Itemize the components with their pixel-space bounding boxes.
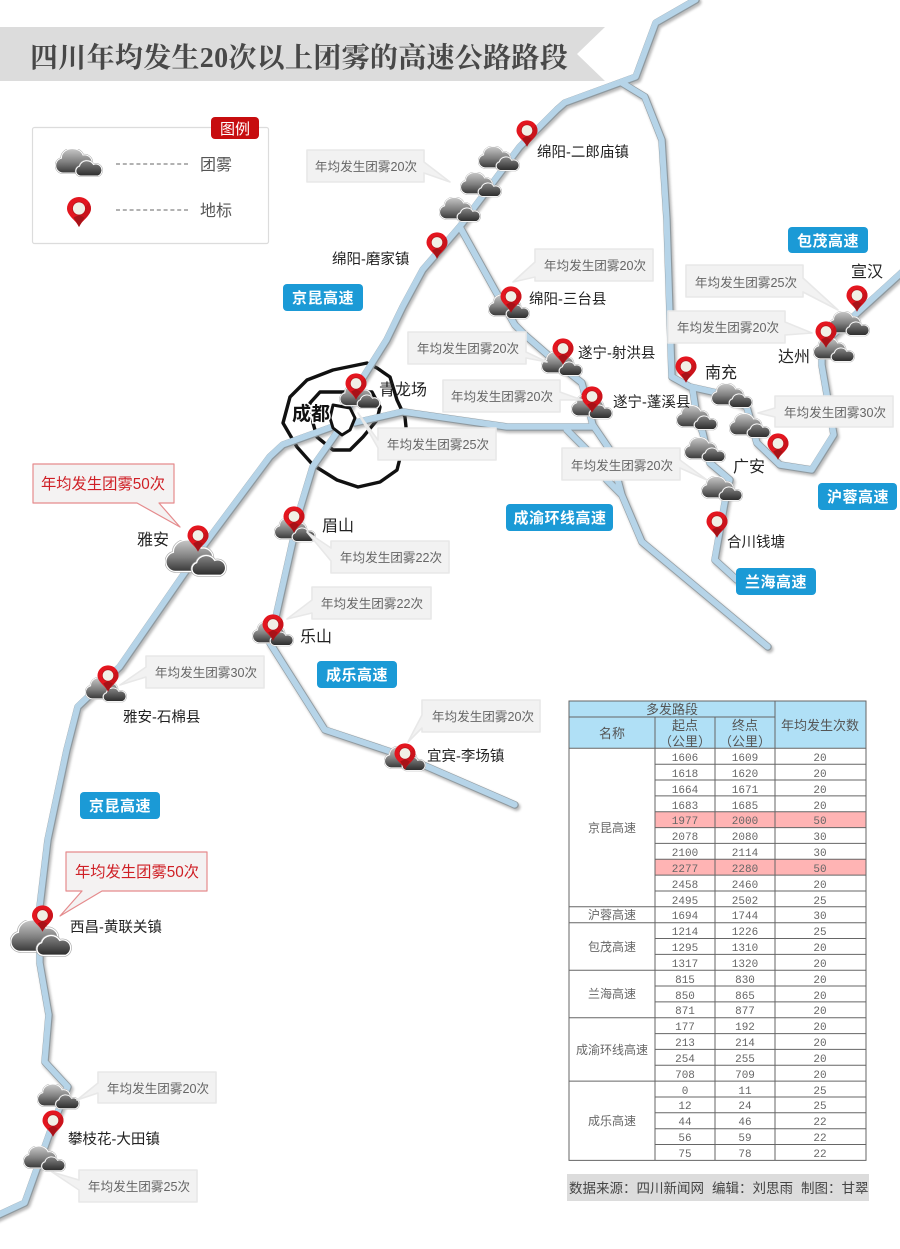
data table: 20 (813, 975, 827, 987)
title banner (0, 27, 605, 81)
place names: 绵阳-三台县 (529, 291, 606, 308)
place names: 宜宾-李场镇 (427, 748, 504, 765)
legend panel: 地标 (200, 202, 232, 220)
place names: 南充 (705, 364, 737, 382)
data table: 2114 (732, 848, 759, 860)
data table: 1694 (672, 911, 699, 923)
place names: 青龙场 (379, 381, 427, 399)
callout: Ya'an 50 (33, 464, 180, 527)
highway label: Chengle (317, 661, 397, 688)
data table: 1320 (732, 959, 758, 971)
data table: 830 (735, 975, 755, 987)
map: Chengdu inner ring (330, 405, 355, 435)
callout: Meishan 22: 年均发生团雾22次 (340, 550, 442, 565)
data table: 20 (813, 769, 827, 781)
data table: 20 (813, 785, 827, 797)
data table: 22 (813, 1133, 827, 1145)
callout: Guang'an 20: 年均发生团雾20次 (571, 458, 673, 473)
highway label: Hurong (818, 483, 897, 510)
callout: Guang'an 20 (562, 448, 707, 480)
data table: 24 (738, 1101, 752, 1113)
callout: Pengxi 20: 年均发生团雾20次 (451, 389, 553, 404)
data table: 0 (682, 1086, 688, 1098)
data table: 起点 (672, 718, 698, 733)
data table: 名称 (599, 726, 625, 741)
highway label: Chengyu ring (506, 504, 613, 531)
place names: 宣汉 (851, 263, 883, 281)
place names: 乐山 (300, 628, 332, 646)
data table: 1620 (732, 769, 758, 781)
data table: 46 (738, 1117, 752, 1129)
callout: Qinglongchang 25 (358, 413, 496, 460)
data table: 多发路段 (646, 702, 698, 717)
data table: （公里） (719, 734, 771, 749)
data table: 1685 (732, 801, 758, 813)
highway label: Jingkun north (283, 284, 363, 311)
data table: 包茂高速 (588, 939, 636, 954)
data table: 2495 (672, 896, 698, 908)
source credit bar (567, 1174, 869, 1201)
data table: 20 (813, 1054, 827, 1066)
highway label: Baomao (788, 227, 868, 253)
data table: 30 (813, 832, 827, 844)
data table: 25 (813, 927, 827, 939)
data table: 20 (813, 1006, 827, 1018)
data table: 2277 (672, 864, 698, 876)
data table: 255 (735, 1054, 755, 1066)
callout: Shimian 30: 年均发生团雾30次 (155, 665, 257, 680)
data table: 1618 (672, 769, 698, 781)
data table: 50 (813, 816, 827, 828)
data table: 708 (675, 1070, 695, 1082)
data table (569, 701, 866, 1161)
place names: 绵阳-磨家镇 (332, 251, 409, 268)
data table: 11 (738, 1086, 752, 1098)
data table: 59 (738, 1133, 752, 1145)
data table: 成乐高速 (588, 1113, 636, 1128)
highway label: Jingkun south (80, 792, 160, 819)
data table: 20 (813, 753, 827, 765)
data table: 2078 (672, 832, 698, 844)
data table: 2000 (732, 816, 758, 828)
callout: Qinglongchang 25: 年均发生团雾25次 (387, 437, 489, 452)
callout: Xichang 50: 年均发生团雾50次 (75, 864, 199, 881)
data table: 877 (735, 1006, 755, 1018)
data table: 30 (813, 848, 827, 860)
place names: 眉山 (322, 517, 354, 535)
data table: 30 (813, 911, 827, 923)
data table: 1744 (732, 911, 759, 923)
callout: Yibin 20: 年均发生团雾20次 (432, 709, 534, 724)
highway label: Jingkun south: 京昆高速 (89, 797, 151, 815)
data table: 25 (813, 1086, 827, 1098)
place names: 绵阳-二郎庙镇 (537, 144, 629, 161)
data table: 20 (813, 1038, 827, 1050)
callout: Shehong 20 (408, 332, 547, 364)
callout: Panzhihua 20: 年均发生团雾20次 (107, 1081, 209, 1096)
callout: Xichang 50 (60, 852, 207, 916)
data table: 1683 (672, 801, 698, 813)
callout: Santai 20 (513, 249, 653, 282)
data table: 1664 (672, 785, 699, 797)
data table: 75 (678, 1149, 692, 1161)
data table: 192 (735, 1022, 755, 1034)
data table: 177 (675, 1022, 695, 1034)
place names: 攀枝花-大田镇 (68, 1131, 160, 1148)
place names (68, 144, 883, 1148)
data table: 1317 (672, 959, 698, 971)
data table: 20 (813, 991, 827, 1003)
callout: Panzhihua 20 (77, 1072, 216, 1103)
data table: 1310 (732, 943, 758, 955)
data table: 20 (813, 1022, 827, 1034)
data table: 1214 (672, 927, 699, 939)
callout: Panzhihua 25: 年均发生团雾25次 (88, 1179, 190, 1194)
fog cloud icons (11, 146, 869, 1171)
callout: Shimian 30 (120, 656, 264, 688)
data table: 1609 (732, 753, 758, 765)
place names: 雅安-石棉县 (123, 709, 200, 726)
place names: 达州 (778, 348, 810, 366)
callout: Xuanhan 25 (686, 265, 838, 310)
data table: 78 (738, 1149, 752, 1161)
data table: 20 (813, 959, 827, 971)
title banner: 四川年均发生20次以上团雾的高速公路路段 (30, 42, 568, 74)
data table: 终点 (732, 718, 758, 733)
location pins (32, 120, 868, 1137)
legend panel: 团雾 (200, 156, 232, 174)
data table: 兰海高速 (588, 986, 636, 1001)
data table: 12 (678, 1101, 692, 1113)
data table: 2280 (732, 864, 758, 876)
city label: Chengdu: 成都 (292, 402, 330, 425)
place names: 雅安 (137, 531, 169, 549)
highway label: Baomao: 包茂高速 (797, 232, 859, 250)
data table: 20 (813, 943, 827, 955)
data table: 2100 (672, 848, 698, 860)
callout: Panzhihua 25 (52, 1170, 197, 1202)
highway label: Lanhai: 兰海高速 (745, 573, 807, 591)
callout: Santai 20: 年均发生团雾20次 (544, 258, 646, 273)
data table: 年均发生次数 (781, 718, 859, 733)
data table: 沪蓉高速 (588, 907, 636, 922)
data table: 1226 (732, 927, 758, 939)
highway label: Chengle: 成乐高速 (326, 666, 388, 684)
data table: 850 (675, 991, 695, 1003)
data table: 20 (813, 801, 827, 813)
data table: 1977 (672, 816, 698, 828)
callout: Xuanhan 25: 年均发生团雾25次 (695, 275, 797, 290)
data table: 2460 (732, 880, 758, 892)
callout: Mianyang 20 (307, 150, 450, 182)
data table: 2458 (672, 880, 698, 892)
data table: 213 (675, 1038, 695, 1050)
callout: Leshan 22: 年均发生团雾22次 (321, 596, 423, 611)
source credit bar: 数据来源：四川新闻网 (569, 1177, 704, 1197)
source credit bar: 编辑：刘思雨 (712, 1177, 793, 1197)
callout: Meishan 22 (307, 532, 449, 573)
source credit bar: 制图：甘翠 (801, 1177, 868, 1197)
data table: 871 (675, 1006, 695, 1018)
data table: 254 (675, 1054, 695, 1066)
data table: 2080 (732, 832, 758, 844)
place names: 西昌-黄联关镇 (70, 919, 162, 936)
data table: 2502 (732, 896, 758, 908)
callout: Ya'an 50: 年均发生团雾50次 (41, 476, 165, 493)
data table: 25 (813, 896, 827, 908)
callout: Nanchong 30: 年均发生团雾30次 (784, 405, 886, 420)
data table: 50 (813, 864, 827, 876)
data table: 56 (678, 1133, 692, 1145)
place names: 广安 (733, 458, 765, 476)
callout: Mianyang 20: 年均发生团雾20次 (315, 159, 417, 174)
data table: 22 (813, 1149, 827, 1161)
highway label: Chengyu ring: 成渝环线高速 (513, 509, 607, 527)
data table: 865 (735, 991, 755, 1003)
data table: 成渝环线高速 (576, 1042, 648, 1057)
legend panel (32, 117, 268, 244)
data table: 京昆高速 (588, 820, 636, 835)
data table: 20 (813, 880, 827, 892)
data table: 22 (813, 1117, 827, 1129)
highway label: Jingkun north: 京昆高速 (292, 289, 354, 307)
callout: Dazhou 20 (668, 311, 812, 343)
data table: 815 (675, 975, 695, 987)
data table: 709 (735, 1070, 755, 1082)
data table: 25 (813, 1101, 827, 1113)
legend panel: 图例 (220, 121, 250, 138)
data table: 214 (735, 1038, 755, 1050)
data table: 20 (813, 1070, 827, 1082)
place names: 遂宁-蓬溪县 (613, 394, 690, 411)
callout: Yibin 20 (408, 700, 540, 742)
callout: Shehong 20: 年均发生团雾20次 (417, 341, 519, 356)
callout: Pengxi 20 (443, 380, 582, 412)
place names: 遂宁-射洪县 (578, 345, 655, 362)
callout: Leshan 22 (287, 587, 431, 619)
data table: 44 (678, 1117, 692, 1129)
place names: 合川钱塘 (727, 534, 785, 551)
data table: 1671 (732, 785, 759, 797)
highway label: Lanhai (736, 568, 816, 595)
callout: Dazhou 20: 年均发生团雾20次 (677, 320, 779, 335)
data table: （公里） (659, 734, 711, 749)
data table: 1606 (672, 753, 698, 765)
map: Chengdu outer rings (283, 363, 406, 487)
highway label: Hurong: 沪蓉高速 (827, 488, 889, 506)
callout: Nanchong 30 (758, 396, 893, 427)
data table: 1295 (672, 943, 698, 955)
